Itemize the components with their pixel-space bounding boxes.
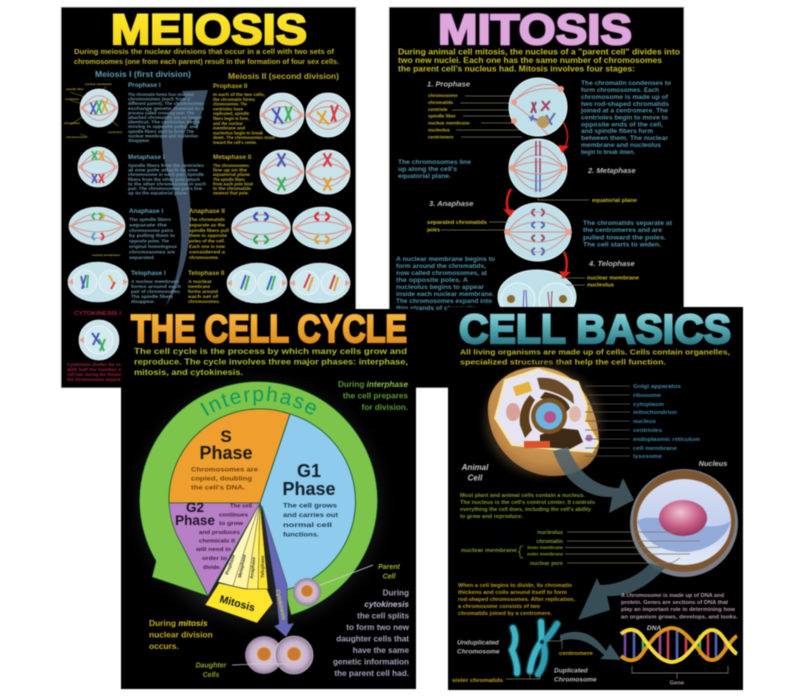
text: Prophase I: nuclear membrane and nucleolus xyxy=(128,133,198,138)
text: Anaphase II xyxy=(189,208,229,260)
text: Metaphase II: Metaphase II xyxy=(213,154,252,161)
title: Cell Basics: CELL BASICS xyxy=(459,306,731,352)
pie sector: G1 phase: and carries out xyxy=(283,512,338,519)
diagram: mitosis anaphase cell xyxy=(504,203,572,261)
anaphase labels xyxy=(427,220,508,234)
text: metaphase description: equatorial plane. xyxy=(398,174,451,180)
text: nucleus description xyxy=(460,493,595,520)
text: Prophase II: Prophase II xyxy=(213,83,248,90)
diagram: Anaphase I cell xyxy=(69,207,125,245)
text: prophase description: membrane and nucleolus xyxy=(581,143,662,149)
text: Prophase II: membrane and xyxy=(213,126,245,131)
text: prophase description: begin to break down. xyxy=(581,150,635,156)
organelle labels: endoplasmic reticulum xyxy=(633,437,700,443)
cytokinesis arrow: Cytokinesis xyxy=(274,589,286,621)
pie sector: G1 phase: functions. xyxy=(283,532,319,538)
diagram: Prophase I cell with labels: chromosomes xyxy=(66,135,87,139)
cell basics intro text: specialized structures that help the cell function. xyxy=(460,358,666,366)
text: during mitosis: occurs. xyxy=(149,641,179,651)
label and diagram: Cytokinesis I: with half the number of xyxy=(66,367,124,372)
nucleus labels: inner membrane xyxy=(527,545,563,550)
chromosome labels: Unduplicated xyxy=(457,640,500,646)
pie sector: G1 phase xyxy=(260,414,355,590)
text: Telophase I: The spindle fibers xyxy=(131,294,173,299)
text: Anaphase I: separate the xyxy=(129,222,168,227)
curved blue arrow xyxy=(162,90,208,307)
text: DNA description: A chromosome is made up of DNA and xyxy=(621,593,725,599)
pie sector: G1 phase: normal cell xyxy=(283,522,332,529)
text: Telophase II: chromosomes. xyxy=(188,299,220,304)
mitosis fan: Anaphase xyxy=(249,556,256,579)
text: DNA description: play an important role in determining how xyxy=(621,607,736,613)
text: Prophase I: process called crossing over. The xyxy=(128,110,194,115)
pie sector: S phase: S xyxy=(220,427,232,446)
text: Metaphase II: line up on the xyxy=(213,168,248,173)
diagram: Prophase I cell with labels: chromatids xyxy=(64,121,81,125)
text: Telophase II: forms around xyxy=(188,289,218,294)
text: Anaphase II: considered a xyxy=(189,249,226,254)
pie sector: G2 phase: order to xyxy=(202,556,228,562)
panel: cell basics poster xyxy=(448,306,743,690)
organelle labels: ribosome xyxy=(633,393,662,399)
text: Telophase II xyxy=(188,270,225,304)
text: chromosome description: thickens and coils around itself to form xyxy=(458,590,567,596)
anaphase labels: poles xyxy=(427,228,440,234)
diagram: Telophase II cells xyxy=(227,263,350,303)
diagram: Telophase I cell xyxy=(68,253,128,302)
panel: meiosis poster xyxy=(61,6,356,388)
ring label: Interphase: Interphase xyxy=(200,386,316,416)
nucleus labels: outer membrane xyxy=(527,552,563,556)
prophase labels: spindle fiber xyxy=(428,114,456,118)
text: during cytokinesis: cytokinesis xyxy=(364,600,409,609)
mitosis intro text: the parent cell's nucleus had. Mitosis involves four stages: xyxy=(398,64,635,74)
text: Telophase I: forms around each xyxy=(131,284,181,289)
text: Prophase II: nucleolus begin to break xyxy=(213,130,263,135)
text: nucleus description: The nucleus is the cell's control center. It controls xyxy=(460,500,595,506)
chromosome labels: centromere xyxy=(559,651,593,657)
chromosome labels xyxy=(452,640,597,684)
parent cell xyxy=(293,564,401,606)
prophase labels: centromere xyxy=(428,134,454,140)
organelle labels: cell membrane xyxy=(633,446,678,452)
diagram: Prophase I cell with labels xyxy=(64,82,122,139)
pie sector: G1 phase: The cell grows xyxy=(283,502,338,510)
prophase labels: chromatids xyxy=(428,100,454,105)
text: telophase description: A nuclear membrane begins to xyxy=(396,257,495,263)
nucleus labels xyxy=(461,530,700,567)
pie sector: G1 phase: Phase xyxy=(282,479,336,499)
text: Prophase II: In each of the two cells, xyxy=(213,92,265,97)
pie sector: S phase: the cell's DNA. xyxy=(191,484,245,492)
label and diagram: Cytokinesis I xyxy=(66,311,124,382)
text: during interphase: During interphase xyxy=(338,380,408,389)
heading: 1. Prophase: 1. Prophase xyxy=(427,80,471,88)
pie sector: G2 phase: G2 xyxy=(186,500,204,515)
organelle labels: nucleus xyxy=(633,419,656,425)
nucleus labels: nucleolus xyxy=(537,530,563,536)
text: during mitosis: nuclear division xyxy=(149,630,213,640)
text: Prophase I: chromosomes (each from a xyxy=(128,97,190,102)
text: Telophase I: pair of chromosomes. xyxy=(131,289,181,294)
text: during cytokinesis: the parent cell had. xyxy=(334,669,409,678)
diagram: Metaphase I cell xyxy=(78,147,118,187)
heading: 4. Telophase: 4. Telophase xyxy=(588,259,635,268)
cell cycle intro text xyxy=(134,347,408,377)
text: chromosome description: a chromosome consists of two xyxy=(458,604,541,610)
text: telophase description: thin strands of chromatin. xyxy=(396,306,478,312)
text: during mitosis xyxy=(149,618,213,651)
arrows: red mitosis stage arrows xyxy=(503,122,571,279)
pie sector: S phase xyxy=(169,409,290,503)
text: Metaphase I: up on the equatorial plane. xyxy=(128,191,188,196)
text: Telophase I: Telophase I xyxy=(131,270,166,277)
text: prophase description xyxy=(580,81,671,156)
text: Prophase I: attached chromatids are no longer xyxy=(128,115,202,120)
text: during cytokinesis: have the same xyxy=(353,646,409,655)
text: prophase description: opposite ends of the cell, xyxy=(581,122,663,128)
label and diagram: Cytokinesis I: the chromosomes separate xyxy=(67,377,123,382)
text: Anaphase II: poles of the cell. xyxy=(189,239,225,244)
heading: Meiosis II: Meiosis II (second division) xyxy=(228,72,339,81)
text: Anaphase I: separated. xyxy=(129,255,155,260)
illustration: DNA helix xyxy=(621,628,737,662)
text: Metaphase I xyxy=(128,154,206,196)
label: equatorial plane xyxy=(538,197,637,204)
pie sector: G2 phase: and produces xyxy=(199,530,240,536)
text: telophase description: The chromosomes expand into xyxy=(396,299,492,305)
text: chromosome description: When a cell begins to divide, its chromatin xyxy=(458,583,573,589)
label and diagram: Cytokinesis I: cell had. During the division xyxy=(67,372,123,377)
text: telophase description: now called chromosomes, at xyxy=(396,271,487,277)
title: Meiosis: MEIOSIS xyxy=(111,6,307,54)
text: prophase description: The chromatin condenses to xyxy=(581,81,671,87)
text: Prophase II: and the nuclear xyxy=(213,121,243,126)
meiosis intro text: chromosomes (one from each parent) result in the formation of four sex cells. xyxy=(74,57,339,66)
daughter cells xyxy=(196,636,313,679)
text: Prophase I: identical. The centrioles begin xyxy=(128,120,200,125)
label: Animal Cell: Animal xyxy=(461,463,489,472)
chromosome labels: sister chromatids xyxy=(452,678,503,684)
text: DNA description: an organism grows, develops, and looks. xyxy=(621,614,738,620)
text: Metaphase I: pair. The chromosomes pairs line xyxy=(128,186,202,191)
text: Anaphase I: The spindle fibers xyxy=(129,217,171,222)
text: anaphase description: the centromeres and are xyxy=(583,228,663,234)
organelle labels: centrioles xyxy=(633,428,662,434)
text: Anaphase I: Anaphase I xyxy=(129,208,163,215)
panel: mitosis poster xyxy=(389,6,684,388)
meiosis intro text xyxy=(74,47,339,66)
illustration: chromosomes xyxy=(512,622,557,674)
diagram: Prophase I cell with labels: nuclear membrane xyxy=(85,82,112,86)
text: prophase description: two rod-shaped chromatids xyxy=(581,102,670,108)
text: Telophase I: disappear. xyxy=(131,299,155,304)
text: Anaphase I: original homologous xyxy=(129,244,177,249)
green interphase ring arrow xyxy=(139,382,377,615)
text: Metaphase II: The spindle fibers xyxy=(213,177,245,182)
text: anaphase description: The chromatids separate at xyxy=(583,221,672,227)
pie sector: S phase: copied, doubling xyxy=(191,476,252,482)
panel: the cell cycle poster xyxy=(120,308,417,690)
text: Prophase I: Prophase I xyxy=(128,82,161,89)
text: Metaphase I: Metaphase I xyxy=(128,154,165,161)
text: Metaphase II: from each pole bind xyxy=(213,181,253,186)
text: Prophase II: toward the cell's center. xyxy=(213,140,257,145)
label and diagram: Cytokinesis I: CYTOKINESIS I xyxy=(74,311,121,317)
heading: 2. Metaphase: 2. Metaphase xyxy=(587,166,636,175)
mitosis arrow xyxy=(205,583,273,623)
text: Prophase II: fibers begin to form, xyxy=(213,116,249,121)
text: during cytokinesis: the cell splits xyxy=(357,612,409,620)
text: Telophase II: A nuclear xyxy=(188,279,212,284)
parent cell: Cell xyxy=(383,574,396,580)
text: chromosome description: rod-shaped chromosomes. After replication, xyxy=(458,597,575,603)
text: during interphase xyxy=(338,380,408,412)
soft glow behind wheel xyxy=(122,365,398,641)
text: anaphase description xyxy=(583,221,672,248)
text: Telophase II: membrane xyxy=(188,284,210,289)
pie sector: G1 phase: G1 xyxy=(297,461,321,481)
text: Anaphase II: Each one is now xyxy=(189,244,225,249)
organelle labels: Golgi apparatus xyxy=(633,384,681,390)
text: during cytokinesis: daughter cells that xyxy=(336,634,409,644)
mitosis intro text: During animal cell mitosis, the nucleus of a "parent cell" divides into xyxy=(398,48,680,56)
heading: Meiosis I: Meiosis I (first division) xyxy=(95,70,191,79)
text: Metaphase II: equatorial plane. xyxy=(213,172,251,177)
nucleus labels: chromatin xyxy=(536,539,564,545)
text: Anaphase I: opposite poles. The xyxy=(129,239,169,244)
text: Anaphase I xyxy=(129,208,177,260)
text: Prophase II: down. The chromosomes move xyxy=(213,135,275,140)
text: Prophase II: the chromatin forms xyxy=(213,97,255,102)
diagram: mitosis metaphase cell xyxy=(509,139,567,197)
text: metaphase description xyxy=(398,160,472,180)
daughter cells: Daughter xyxy=(196,662,228,670)
text: Anaphase II: spindle fibers pull xyxy=(189,228,229,233)
text: prophase description: centrioles begin to move to xyxy=(581,116,668,122)
diagram: Anaphase II cells xyxy=(232,207,351,249)
diagram: Prophase I cell with labels: spindle fiber xyxy=(66,87,85,91)
text: nucleus description: everything the cell does, including the cell's ability xyxy=(460,507,592,513)
text: Telophase II: Telophase II xyxy=(188,270,225,277)
pie sector: S phase: Chromosomes are xyxy=(191,466,259,474)
text: prophase description: and spindle fibers form xyxy=(581,129,653,135)
mitosis fan xyxy=(205,503,273,623)
label: Nucleus: Nucleus xyxy=(699,459,727,468)
gene bracket and label xyxy=(632,666,728,686)
text: Metaphase I: at one pole attach to one xyxy=(128,168,199,173)
text: chromosome description: chromatids joined by a centromere. xyxy=(458,611,552,617)
text: Metaphase II: to the chromatids xyxy=(213,186,251,191)
pie sector: S phase: Phase xyxy=(199,443,253,463)
prophase labels: centriole xyxy=(428,107,448,112)
text: Prophase II: replicated, spindle xyxy=(213,111,249,116)
cell basics intro text: All living organisms are made up of cells. Cells contain organelles, xyxy=(460,348,730,356)
daughter cells: Cells xyxy=(203,672,219,679)
text: Prophase I: disappear. xyxy=(128,138,150,143)
prophase labels: chromosome xyxy=(428,93,458,98)
organelle labels: cytoplasm xyxy=(633,402,664,408)
pie sector: G2 phase: The cell xyxy=(230,504,253,510)
title: The Cell Cycle: THE CELL CYCLE xyxy=(131,308,407,351)
text: during cytokinesis: genetic information xyxy=(333,658,409,666)
text: Prophase I: The chromatin forms four-stranded xyxy=(128,92,194,97)
arrow: chromosome to DNA xyxy=(560,632,621,660)
text: during cytokinesis xyxy=(333,588,410,678)
text: prophase description: joined at a centromere. The xyxy=(580,108,669,114)
organelle labels xyxy=(585,384,700,460)
text: metaphase description: The chromosomes line xyxy=(398,160,472,166)
text: prophase description: form chromosomes. Each xyxy=(581,88,659,94)
nucleus labels: nuclear pore xyxy=(530,561,563,567)
pie sector: G2 phase: to grow xyxy=(219,521,244,527)
text: telophase description: inside each nuclear membrane. xyxy=(396,292,494,298)
text: Anaphase II: Anaphase II xyxy=(189,208,225,215)
arrow: nucleus to chromosome xyxy=(578,563,665,620)
mitosis intro text xyxy=(398,48,680,74)
label: DNA: DNA xyxy=(647,625,661,632)
text: Metaphase II: nearest that pole. xyxy=(213,191,249,196)
text: Prophase I xyxy=(128,82,205,143)
text: telophase description: form around the chromatids, xyxy=(396,264,486,270)
title: Mitosis: MITOSIS xyxy=(438,6,632,54)
heading: 3. Anaphase: 3. Anaphase xyxy=(429,199,474,208)
text: Anaphase I: chromosomes are xyxy=(129,249,176,254)
organelle labels: mitochondrion xyxy=(633,410,677,416)
parent cell: Parent xyxy=(378,564,401,571)
text: Metaphase I: Spindle fibers from the centrioles xyxy=(128,163,204,168)
text: Prophase I: moving to opposite poles, and xyxy=(128,124,198,129)
mitosis fan: Metaphase xyxy=(237,554,247,578)
telophase labels xyxy=(561,276,639,288)
label: equatorial plane: equatorial plane xyxy=(592,198,637,204)
cytokinesis arrow xyxy=(262,506,294,637)
diagram: Prophase I cell with labels: nucleolus xyxy=(108,130,122,134)
cell cycle intro text: mitosis, and cytokinesis. xyxy=(134,368,243,377)
text: prophase description: chromosome is made up of xyxy=(581,95,669,101)
text: during mitosis: During mitosis xyxy=(149,618,208,628)
text: nucleus description: Most plant and animal cells contain a nucleus. xyxy=(460,493,585,499)
text: Telophase I: A nuclear membrane xyxy=(131,279,179,284)
mitosis fan: Mitosis xyxy=(218,593,256,614)
text: Anaphase I: by pulling them to xyxy=(129,233,175,238)
text: during cytokinesis: to form two new xyxy=(346,623,410,632)
telophase labels: nuclear membrane xyxy=(587,276,639,282)
mitosis fan: Prophase xyxy=(224,554,236,575)
diagram: Prophase II cells xyxy=(260,93,350,137)
mitosis intro text: two new nuclei. Each one has the same number of chromosomes xyxy=(398,56,663,65)
cell cycle intro text: reproduce. The cycle involves three major phases: interphase, xyxy=(134,358,408,366)
pie sector: G2 phase: chemicals it xyxy=(199,538,235,544)
nucleus labels: nuclear membrane xyxy=(461,548,517,554)
text: Anaphase II: separate as the xyxy=(189,222,225,227)
cell basics intro text xyxy=(460,348,730,366)
cell cycle intro text: The cell cycle is the process by which many cells grow and xyxy=(134,347,407,356)
telophase labels: nucleolus xyxy=(587,282,614,288)
prophase labels: nuclear membrane xyxy=(428,120,470,126)
text: Prophase I: different parent). The chromosomes xyxy=(128,101,204,106)
text: Prophase II: chromosomes. The xyxy=(213,102,247,107)
diagram: Telophase I cell: nuclear membranes xyxy=(92,253,121,257)
organelle labels: lysosome xyxy=(633,454,663,460)
pie sector: G2 phase: continues xyxy=(219,512,248,518)
chromosome labels: Duplicated xyxy=(554,668,589,674)
text: DNA description: protein. Genes are sections of DNA that xyxy=(621,600,728,606)
text: Prophase II: centrioles have xyxy=(213,106,243,111)
text: telophase description: nucleolus begins to appear xyxy=(396,285,485,291)
text: anaphase description: The cell starts to widen. xyxy=(583,242,661,248)
chromosome labels: Chromosome xyxy=(457,648,500,656)
text: anaphase description: pulled toward the poles. xyxy=(583,236,666,242)
mitosis fan: Telophase xyxy=(260,555,265,578)
chromosome labels: Chromosome xyxy=(554,676,597,684)
text: chromosome description xyxy=(458,583,575,617)
arrow: cell to nucleus xyxy=(553,447,634,513)
pie sector: G2 phase: Phase xyxy=(175,513,215,528)
text: Telophase I xyxy=(131,270,181,304)
text: Anaphase II: them to opposite xyxy=(189,233,227,238)
illustration: nucleus xyxy=(630,469,738,577)
text: Anaphase II: chromosome. xyxy=(189,255,219,260)
pie sector: G2 phase: will need in xyxy=(195,547,231,553)
anaphase labels: separated chromatids xyxy=(427,220,487,226)
prophase labels xyxy=(428,93,525,140)
text: Metaphase II: The chromosomes xyxy=(213,163,249,168)
text: nucleus description: to grow and reproduce. xyxy=(460,514,523,520)
text: Metaphase II xyxy=(213,154,253,196)
text: Telophase II: each set of xyxy=(188,294,219,299)
text: telophase description xyxy=(396,257,495,312)
text: Prophase I: exchange genetic material in a xyxy=(128,106,205,111)
text: prophase description: between them. The nuclear xyxy=(581,136,669,142)
diagram: mitosis telophase cell xyxy=(498,270,576,324)
label: Animal Cell: Cell xyxy=(468,474,483,482)
text: Prophase I: spindle fibers start to form. The xyxy=(128,129,194,134)
text: Metaphase I: fibers from the other pole attach xyxy=(128,177,200,182)
diagram: mitosis prophase cell xyxy=(509,78,567,136)
diagram: Prophase I cell with labels: centrioles xyxy=(65,97,80,101)
label and diagram: Cytokinesis I: Cytokinesis divides the cell xyxy=(67,362,123,367)
text: telophase description: the opposite poles. A xyxy=(396,278,469,284)
gene bracket and label: Gene xyxy=(670,680,685,686)
text: Prophase II xyxy=(213,83,275,145)
pie sector: G2 phase: divide. xyxy=(203,565,222,571)
illustration: animal cell xyxy=(475,357,611,485)
diagram: Metaphase II cells xyxy=(260,150,350,194)
text: during interphase: for division. xyxy=(362,403,408,412)
prophase labels: nucleolus xyxy=(428,128,450,132)
text: Metaphase I: chromosome in each pair. Spindle xyxy=(128,172,204,177)
text: Anaphase II: The chromatids xyxy=(189,217,225,222)
text: during cytokinesis: During xyxy=(383,588,409,598)
meiosis intro text: During meiosis the nuclear divisions that occur in a cell with two sets of xyxy=(74,47,334,56)
text: Anaphase I: chromosome pairs xyxy=(129,228,173,233)
text: Metaphase I: to the other chromosome in each xyxy=(128,181,206,186)
text: metaphase description: up along the cell's xyxy=(398,167,458,173)
text: DNA description xyxy=(621,593,738,620)
text: during interphase: the cell prepares xyxy=(343,392,408,400)
pie sector: G2 phase xyxy=(169,500,260,596)
